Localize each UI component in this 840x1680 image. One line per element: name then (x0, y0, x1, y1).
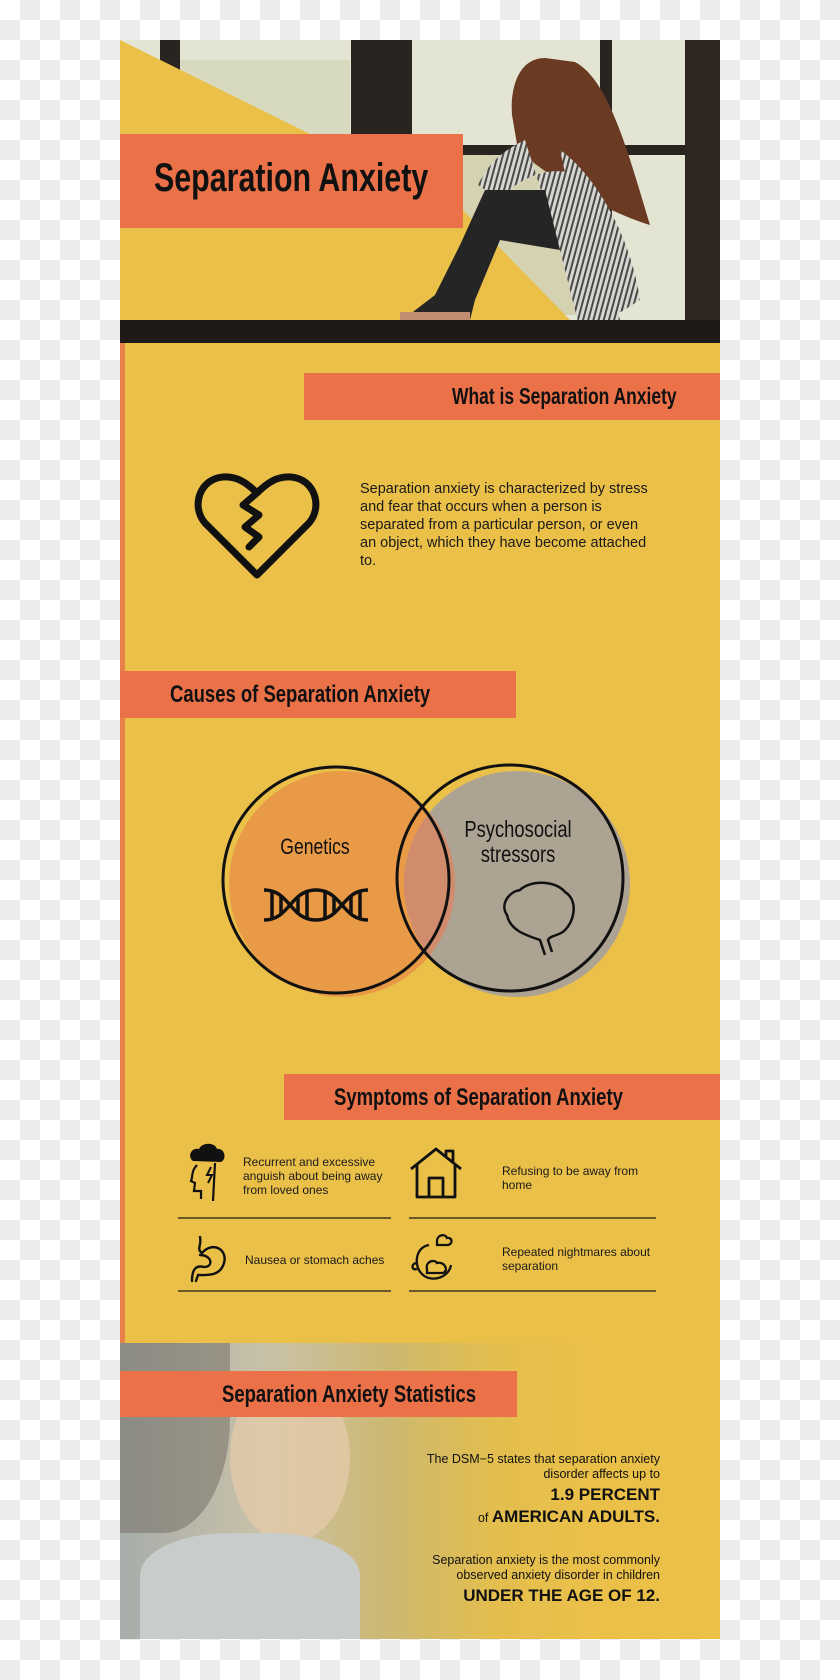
yellow shape (120, 40, 570, 320)
heading: symptoms: Symptoms of Separation Anxiety (334, 1084, 623, 1111)
icon: broken heart (194, 473, 320, 578)
symptom: anguish (190, 1144, 382, 1201)
heading: what is: What is Separation Anxiety (452, 383, 677, 409)
definition text: Separation anxiety is characterized by stress and fear that occurs when a person is separated from a particular person, or even an object, which they have become attached to. (360, 481, 648, 569)
title: Separation Anxiety (154, 156, 428, 200)
stat 2 (432, 1553, 660, 1605)
stat 2: Separation anxiety is the most commonly observed anxiety disorder in children (432, 1553, 660, 1582)
stat 1 (427, 1452, 660, 1526)
stat 1: 1.9 PERCENT (550, 1485, 660, 1504)
symptom: anguish: Recurrent and excessive anguish about being away from loved ones (243, 1155, 382, 1197)
symptom: home (410, 1148, 638, 1198)
label: genetics: Genetics (280, 835, 350, 860)
symptom: stomach (190, 1236, 384, 1282)
heading: what is (304, 373, 720, 420)
stat 1: The DSM−5 states that separation anxiety disorder affects up to (427, 1452, 660, 1481)
symptom: nightmares (411, 1234, 650, 1280)
hero photo (120, 40, 720, 343)
woman (512, 58, 650, 225)
symptoms grid (178, 1144, 656, 1292)
stat 2: UNDER THE AGE OF 12. (463, 1586, 660, 1605)
symptom: home: Refusing to be away from home (502, 1164, 638, 1192)
symptom: stomach: Nausea or stomach aches (245, 1253, 384, 1267)
heading: causes: Causes of Separation Anxiety (170, 681, 430, 708)
venn diagram (222, 764, 630, 997)
label: psychosocial: Psychosocial (464, 817, 572, 843)
main yellow background panel (120, 343, 720, 1639)
venn diagram: stressors (481, 842, 555, 868)
icon: dna (264, 890, 368, 920)
icon: brain (504, 883, 574, 955)
stats photo (120, 1343, 720, 1639)
heading: statistics (120, 1371, 517, 1417)
heading: statistics: Separation Anxiety Statistics (222, 1381, 476, 1408)
symptom: nightmares: Repeated nightmares about separation (502, 1245, 650, 1273)
title (120, 134, 463, 228)
heading: symptoms (284, 1074, 720, 1120)
heading: causes (120, 671, 516, 718)
stat 1: of AMERICAN ADULTS. (478, 1507, 660, 1526)
